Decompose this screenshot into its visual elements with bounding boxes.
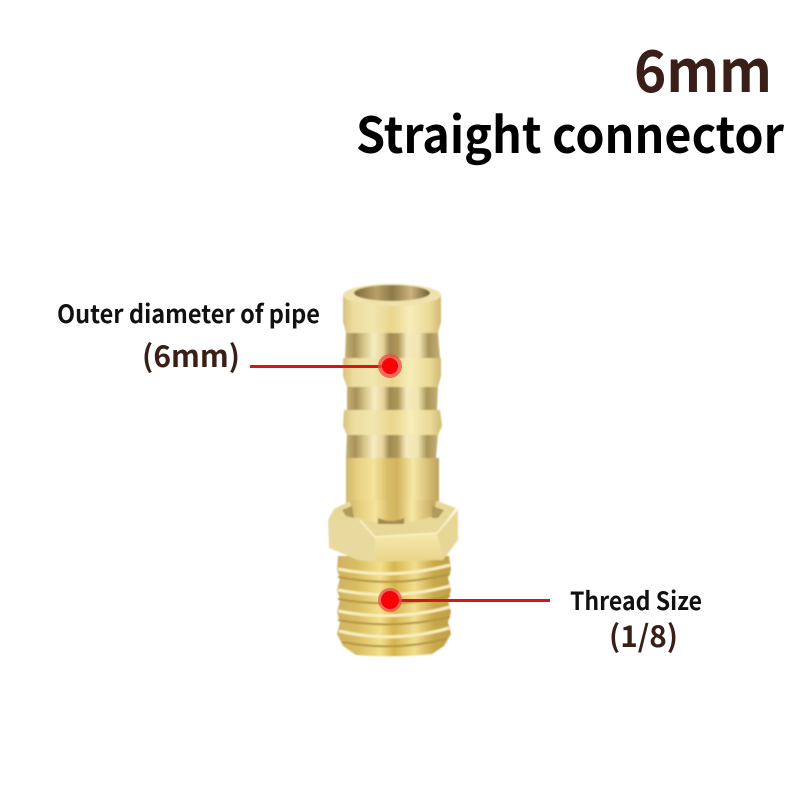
- marker dot: [378, 354, 402, 378]
- pipe opening: [343, 284, 441, 306]
- title: 6mm: 6mm: [634, 25, 772, 109]
- value: (6mm): (6mm): [142, 332, 240, 376]
- hose barb body: [343, 294, 442, 508]
- right face: [437, 509, 458, 560]
- brass fitting illustration: [328, 284, 458, 656]
- value: (1/8): (1/8): [609, 612, 678, 656]
- front face: [375, 533, 445, 562]
- callout: thread size: [378, 582, 702, 656]
- threaded section: [337, 556, 451, 656]
- hex nut: [328, 500, 458, 562]
- callout: outer diameter of pipe: [57, 295, 402, 378]
- label: Thread Size: Thread Size: [570, 582, 702, 618]
- left face: [328, 520, 376, 562]
- hex top chamfer: [328, 501, 456, 537]
- leader line: [250, 365, 386, 368]
- leader line: [396, 599, 550, 602]
- shaft base: [350, 500, 436, 523]
- label: Outer diameter of pipe: Outer diameter of pipe: [57, 295, 320, 331]
- marker dot: [378, 588, 402, 612]
